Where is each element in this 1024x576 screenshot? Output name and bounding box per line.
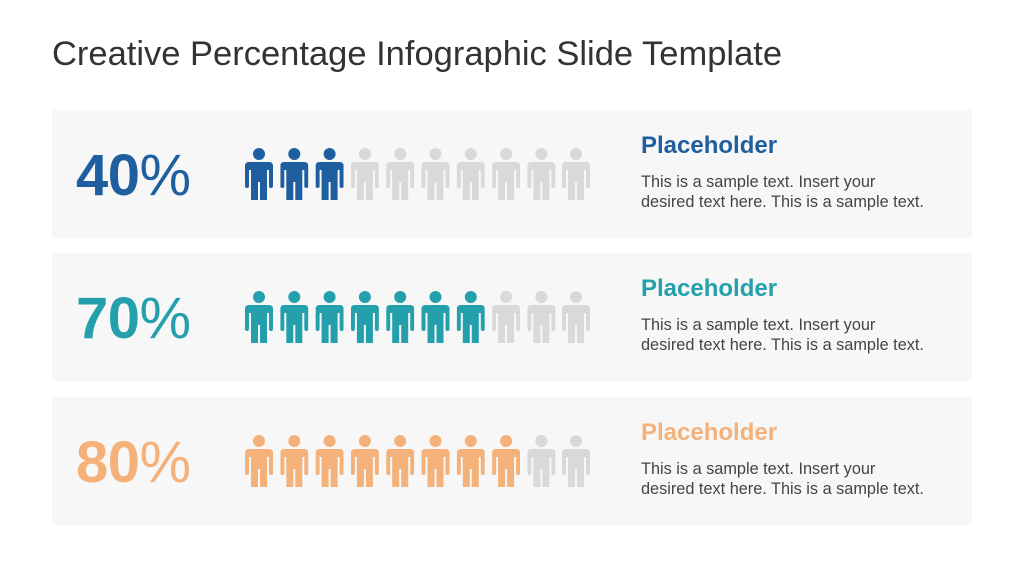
text block: This is a sample text. Insert your <box>641 173 875 191</box>
text block: desired text here. This is a sample text. <box>641 193 924 211</box>
percentage 80: 80% <box>76 430 191 495</box>
text block: This is a sample text. Insert your <box>641 316 875 334</box>
text block: This is a sample text. Insert your <box>641 460 875 478</box>
panel: 70% <box>52 253 972 381</box>
title: Creative Percentage Infographic Slide Template <box>52 35 782 73</box>
text block <box>641 316 924 354</box>
panel: 40% <box>52 110 972 238</box>
icons: people 8 of 10 <box>245 435 590 487</box>
text block: desired text here. This is a sample text. <box>641 480 924 498</box>
text block <box>641 173 924 211</box>
text block <box>641 460 924 498</box>
percentage 40: 40% <box>76 143 191 208</box>
icons: people 7 of 10 <box>245 291 590 343</box>
panel: 80% <box>52 397 972 525</box>
percentage 70: 70% <box>76 286 191 351</box>
heading: Placeholder <box>641 132 777 159</box>
heading: Placeholder <box>641 275 777 302</box>
text block: desired text here. This is a sample text. <box>641 336 924 354</box>
icons: people 4 of 10 <box>245 148 590 200</box>
heading: Placeholder <box>641 419 777 446</box>
